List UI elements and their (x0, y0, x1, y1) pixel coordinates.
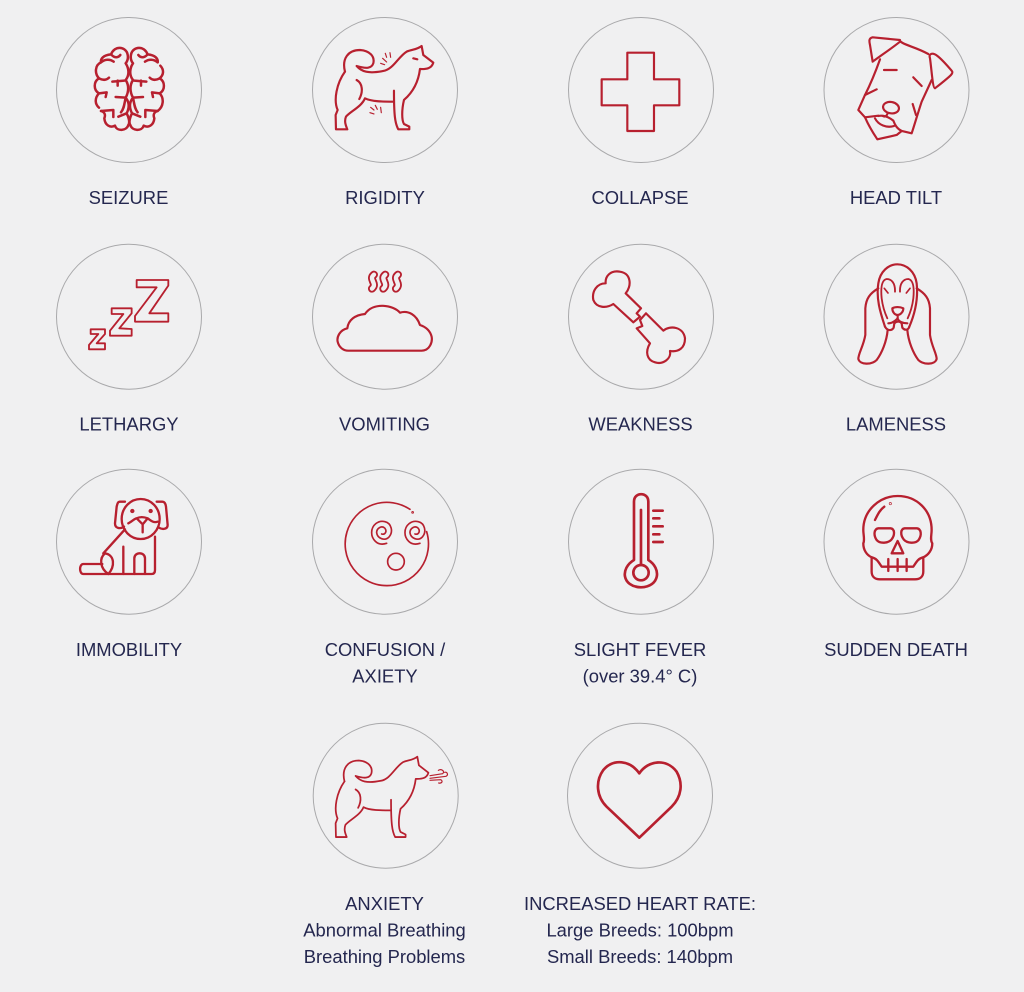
icon: sitting dog (80, 499, 168, 574)
icon: tilted dog head (858, 37, 952, 139)
panel: vomiting (312, 244, 458, 435)
panel: weakness (568, 244, 714, 435)
icon: dizzy face (345, 502, 428, 586)
label: increased heart rate: Small Breeds: 140bpm (547, 946, 733, 967)
icon: basset hound (858, 264, 937, 364)
label: confusion / axiety: CONFUSION / (325, 639, 446, 660)
panel: confusion (312, 469, 458, 687)
label: increased heart rate (524, 893, 756, 967)
label: vomiting: VOMITING (339, 414, 430, 435)
label: anxiety: ANXIETY (345, 893, 424, 914)
label: collapse: COLLAPSE (591, 187, 689, 208)
panel: lethargy (56, 244, 202, 435)
label: rigidity: RIGIDITY (345, 187, 425, 208)
label: increased heart rate: Large Breeds: 100bpm (546, 920, 734, 941)
label: sudden death: SUDDEN DEATH (824, 639, 968, 660)
label: slight fever: SLIGHT FEVER (574, 639, 706, 660)
label: lameness: LAMENESS (846, 414, 946, 435)
label: immobility: IMMOBILITY (76, 639, 182, 660)
label: slight fever (574, 639, 706, 687)
label: slight fever: (over 39.4° C) (583, 666, 697, 687)
icon: broken bone (593, 271, 685, 363)
icon: rigid dog (336, 46, 433, 129)
label: lethargy: LETHARGY (79, 414, 179, 435)
icon: skull (863, 496, 932, 579)
icon: cloud with vapour (337, 275, 432, 351)
icon: heart (598, 762, 681, 838)
icon: medical cross (602, 53, 679, 131)
label: confusion / axiety (325, 639, 446, 687)
label: increased heart rate: INCREASED HEART RATE: (524, 893, 756, 914)
icon: thermometer (625, 494, 663, 587)
label: anxiety: Breathing Problems (304, 946, 465, 967)
icon: brain (95, 48, 164, 130)
panel: slight fever (568, 469, 714, 687)
label: seizure: SEIZURE (89, 187, 168, 208)
label: weakness: WEAKNESS (588, 414, 693, 435)
label: head tilt: HEAD TILT (850, 187, 942, 208)
panel: lameness (824, 244, 969, 435)
panel: rigidity (312, 18, 458, 208)
panel: sudden death (824, 469, 969, 660)
panel: increased heart rate (524, 723, 756, 967)
label: anxiety: Abnormal Breathing (303, 920, 466, 941)
icon: dog breathing heavily (336, 757, 447, 837)
label: confusion / axiety: AXIETY (352, 666, 418, 687)
panel: seizure (56, 18, 202, 208)
panel: immobility (56, 469, 202, 660)
label: anxiety (303, 893, 466, 967)
panel: anxiety (303, 723, 466, 967)
icon: sleeping z letters (89, 280, 168, 349)
panel: head tilt (824, 18, 969, 208)
panel: collapse (568, 18, 714, 208)
